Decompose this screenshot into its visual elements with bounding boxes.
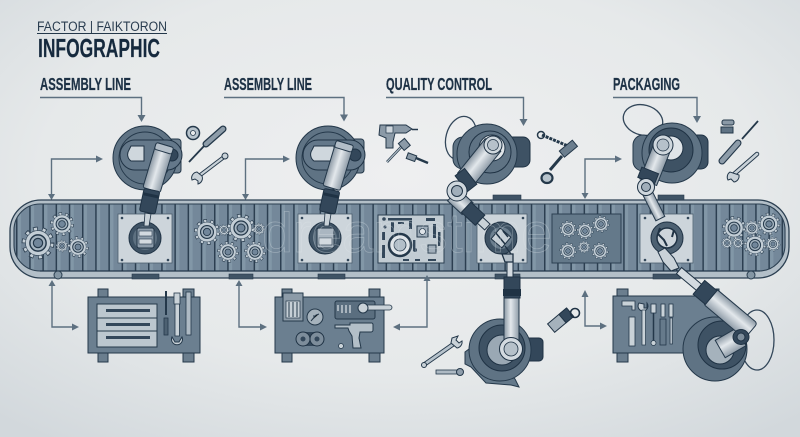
gears: right group: [722, 214, 779, 254]
robot arm 3: [441, 113, 530, 233]
robot arm 2: [296, 126, 365, 226]
dial: [307, 309, 323, 325]
panel: station 4: [640, 214, 693, 263]
robot arm 6: [658, 248, 774, 381]
toolboard 3: [613, 289, 723, 362]
heading: packaging: PACKAGING: [613, 74, 680, 94]
heading: assembly line 1: ASSEMBLY LINE: [40, 74, 131, 94]
robot arm 5: [465, 246, 543, 387]
gears: left group: [24, 214, 87, 257]
watermark: dreamstime: [262, 201, 552, 264]
title: INFOGRAPHIC: [38, 33, 160, 63]
title: [37, 19, 167, 63]
toolboard 1: [88, 289, 200, 362]
tool: clip: [548, 308, 580, 332]
drawers: [97, 304, 157, 347]
heading: assembly line 2: [224, 74, 348, 122]
roller right: [747, 271, 755, 279]
nut: [338, 344, 344, 348]
arrow: toolboard 2 to belt: [393, 275, 430, 330]
heading: assembly line 1: [40, 74, 146, 122]
tools: wrench and bolt: [422, 336, 464, 376]
card: [283, 293, 303, 321]
arrow: belt to toolboard 1: [48, 280, 79, 330]
tools: drill, hammer, key: [379, 125, 428, 163]
tools on board: [622, 301, 673, 346]
panel: gear plate: [552, 214, 621, 263]
tools: bolt, screwdriver, wrench: [721, 120, 758, 182]
panel: station 2: [298, 214, 352, 263]
drill: [335, 323, 373, 348]
heading: quality control: [386, 74, 528, 126]
heading: assembly line 2: ASSEMBLY LINE: [224, 74, 312, 94]
robot arm 4: [620, 100, 708, 221]
heading: quality control: QUALITY CONTROL: [386, 74, 492, 94]
wheels: [296, 332, 324, 346]
robot arm 1: [113, 126, 182, 226]
arrow: belt to toolboard 2: [236, 280, 267, 330]
arrow: belt to robot 2: [242, 156, 290, 200]
panel: station 3: [477, 214, 527, 263]
roller left: [54, 271, 62, 279]
title: FACTOR | FAIKTORON: [37, 19, 167, 34]
arrow: belt to robot 1: [48, 156, 103, 200]
heading: packaging: [613, 74, 701, 123]
toolboard 2: [275, 289, 392, 362]
tools: chain and pliers: [538, 132, 577, 183]
tools on board: [164, 291, 191, 345]
tray with key: [335, 301, 392, 319]
tools: nut, screwdriver, wrench: [186, 126, 228, 184]
conveyor belt: [10, 195, 789, 279]
arrow: toolboard 3 to belt: [582, 290, 607, 330]
gears: second group: [196, 216, 264, 261]
clamps: [132, 195, 684, 279]
arrow: belt to robot 4: [582, 156, 622, 199]
panel: circuit board: [378, 215, 444, 263]
panel: station 1: [118, 214, 172, 263]
